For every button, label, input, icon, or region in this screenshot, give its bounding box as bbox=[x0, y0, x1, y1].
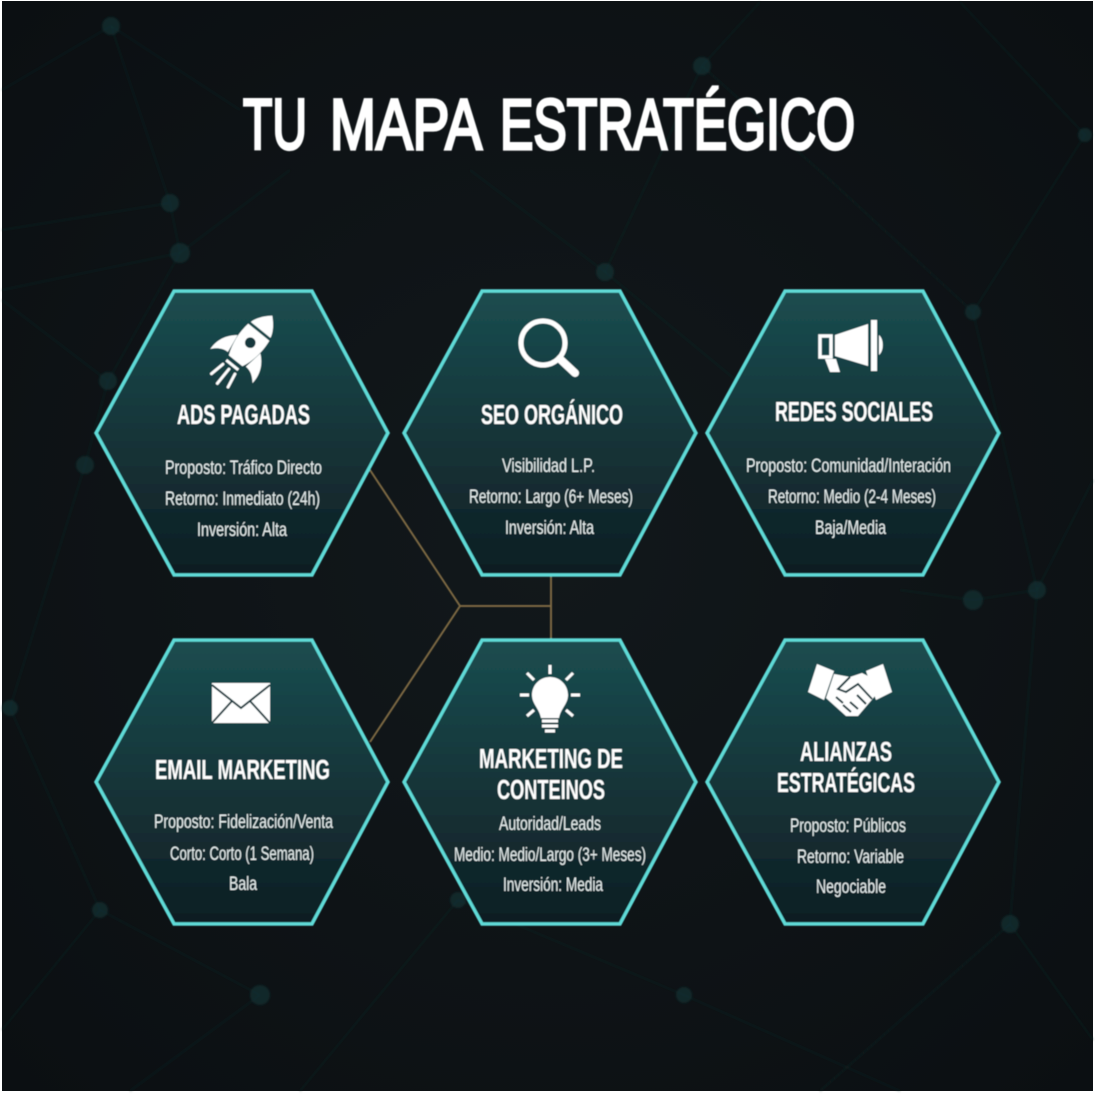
hexagon frame bbox=[707, 640, 999, 924]
body text: Retorno: Medio (2-4 Meses) bbox=[768, 487, 936, 508]
icon: light bulb bbox=[520, 665, 580, 731]
body text: Inversión: Alta bbox=[505, 518, 594, 539]
panel: redes sociales bbox=[707, 291, 999, 575]
body text: Corto: Corto (1 Semana) bbox=[170, 844, 314, 865]
heading: REDES SOCIALES bbox=[775, 396, 933, 427]
body text bbox=[154, 812, 333, 895]
body text: Proposto: Fidelización/Venta bbox=[154, 812, 333, 833]
body text bbox=[469, 456, 633, 539]
icon: rocket bbox=[196, 298, 293, 401]
panel: marketing de conteinos bbox=[404, 640, 696, 924]
body text: Inversión: Media bbox=[503, 875, 603, 896]
title: MAPA bbox=[330, 86, 482, 165]
icon: envelope bbox=[212, 683, 270, 723]
body text: Proposto: Comunidad/Interación bbox=[746, 456, 951, 477]
body text: Baja/Media bbox=[815, 518, 886, 539]
body text: Proposto: Tráfico Directo bbox=[165, 458, 322, 479]
panel: alianzas estratégicas bbox=[707, 640, 999, 924]
body text bbox=[454, 814, 646, 896]
body text: Proposto: Públicos bbox=[790, 816, 906, 837]
heading: EMAIL MARKETING bbox=[155, 754, 330, 785]
body text: Inversión: Alta bbox=[197, 520, 287, 541]
body text bbox=[746, 456, 951, 539]
hexagon frame bbox=[96, 291, 388, 575]
body text: Autoridad/Leads bbox=[499, 814, 601, 835]
icon: handshake bbox=[808, 664, 892, 716]
page content bbox=[96, 86, 999, 924]
body text bbox=[790, 816, 906, 898]
hexagon frame bbox=[404, 291, 696, 575]
icon: magnifying glass bbox=[521, 321, 575, 373]
panel: ads pagadas bbox=[96, 291, 388, 575]
hexagon frame bbox=[707, 291, 999, 575]
body text: Medio: Medio/Largo (3+ Meses) bbox=[454, 845, 646, 866]
body text bbox=[165, 458, 322, 541]
connector lines bbox=[370, 470, 551, 742]
icon: megaphone bbox=[820, 320, 883, 372]
body text: Retorno: Variable bbox=[797, 847, 904, 868]
title: ESTRATÉGICO bbox=[500, 86, 855, 165]
body text: Visibilidad L.P. bbox=[502, 456, 595, 477]
heading: MARKETING DE bbox=[479, 743, 623, 774]
heading: ALIANZAS bbox=[800, 736, 892, 767]
heading bbox=[777, 736, 915, 798]
panel: email marketing bbox=[96, 640, 388, 924]
body text: Retorno: Largo (6+ Meses) bbox=[469, 487, 633, 508]
heading: SEO ORGÁNICO bbox=[481, 399, 623, 430]
title bbox=[243, 86, 855, 165]
heading: CONTEINOS bbox=[497, 774, 605, 805]
title: TU bbox=[243, 86, 307, 165]
heading: ESTRATÉGICAS bbox=[777, 767, 915, 798]
panel: seo orgánico bbox=[404, 291, 696, 575]
body text: Bala bbox=[229, 874, 257, 895]
hexagon frame bbox=[404, 640, 696, 924]
hexagon frame bbox=[96, 640, 388, 924]
body text: Negociable bbox=[816, 877, 886, 898]
heading bbox=[479, 743, 623, 805]
body text: Retorno: Inmediato (24h) bbox=[165, 489, 320, 510]
heading: ADS PAGADAS bbox=[177, 399, 310, 430]
